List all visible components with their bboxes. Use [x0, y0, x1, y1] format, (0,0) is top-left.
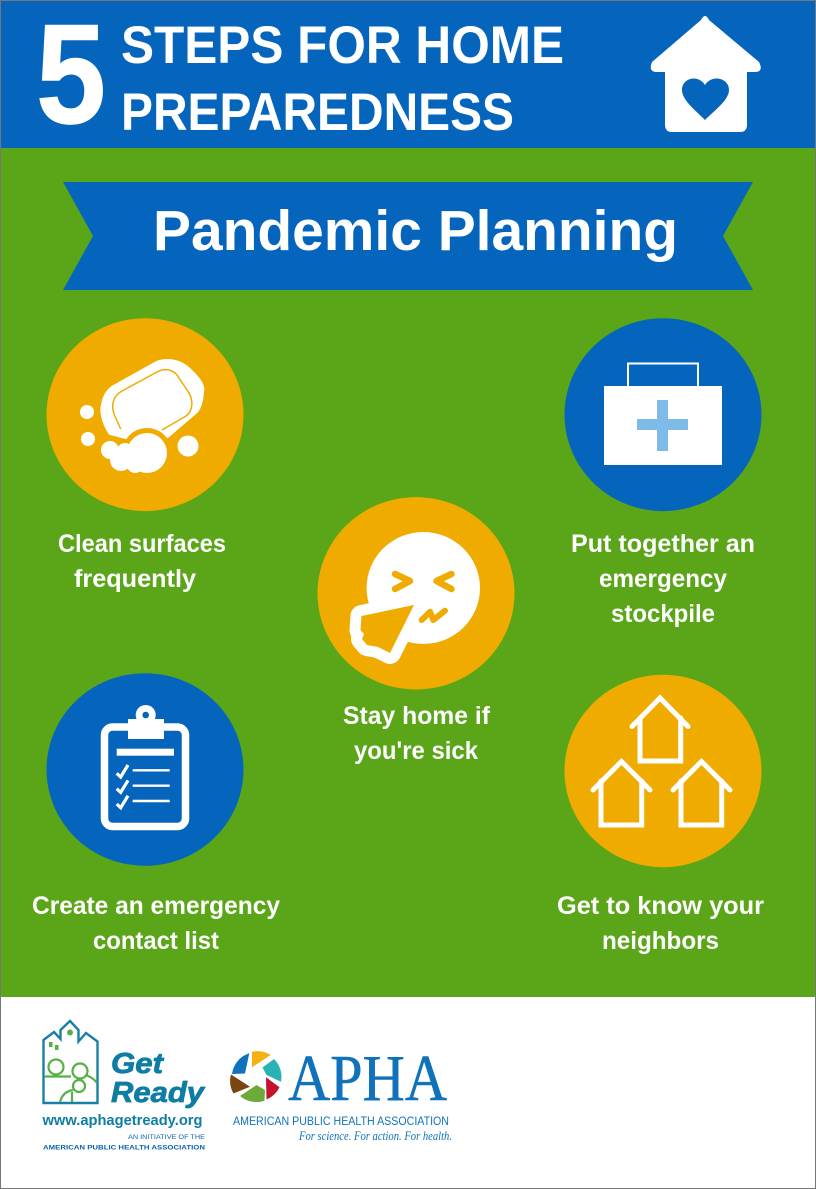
association name: AMERICAN PUBLIC HEALTH ASSOCIATION	[233, 1114, 449, 1128]
title: PREPAREDNESS	[121, 83, 514, 142]
logo: Get Ready	[42, 1021, 206, 1152]
caption: emergency	[599, 565, 727, 593]
initiative note: AMERICAN PUBLIC HEALTH ASSOCIATION	[43, 1144, 205, 1152]
icon: sneezing face	[318, 497, 514, 690]
caption: frequently	[74, 565, 196, 593]
icon: Get Ready house	[44, 1021, 98, 1103]
icon: three houses	[564, 675, 762, 867]
caption: Put together an	[571, 530, 755, 558]
APHA wordmark: APHA	[288, 1042, 447, 1115]
title: STEPS FOR HOME	[121, 16, 564, 75]
caption: Create an emergency	[32, 892, 280, 920]
caption: Clean surfaces	[58, 530, 226, 558]
caption: Get to know your	[557, 892, 764, 920]
panel: clean surfaces	[46, 318, 244, 593]
panel: emergency contact list	[32, 673, 280, 955]
caption	[58, 530, 226, 593]
website: www.aphagetready.org	[42, 1112, 202, 1129]
panel: emergency stockpile	[564, 318, 762, 628]
banner: Pandemic Planning: Pandemic Planning	[153, 199, 678, 263]
logo: APHA	[230, 1042, 452, 1143]
caption	[32, 892, 280, 955]
banner: Pandemic Planning	[63, 182, 753, 290]
caption: stockpile	[611, 600, 715, 628]
initiative note	[43, 1134, 206, 1152]
icon: first aid kit	[564, 318, 762, 511]
caption: neighbors	[602, 927, 719, 955]
header band	[0, 0, 816, 154]
caption	[343, 702, 491, 765]
caption	[557, 892, 764, 955]
icon: clipboard	[46, 673, 244, 866]
initiative note: AN INITIATIVE OF THE	[128, 1134, 206, 1141]
title	[121, 16, 564, 142]
panel: stay home if sick	[318, 497, 514, 765]
tagline: For science. For action. For health.	[298, 1129, 452, 1143]
Get Ready wordmark: Ready	[111, 1077, 206, 1109]
icon: soap	[46, 318, 244, 511]
caption: Stay home if	[343, 702, 491, 730]
caption: you're sick	[354, 737, 478, 765]
panel: know your neighbors	[557, 675, 764, 955]
caption: contact list	[93, 927, 220, 955]
Get Ready wordmark	[111, 1048, 206, 1109]
caption	[571, 530, 755, 628]
icon: house with heart	[651, 16, 761, 132]
icon: APHA wheel	[230, 1051, 281, 1102]
Get Ready wordmark: Get	[111, 1048, 164, 1080]
